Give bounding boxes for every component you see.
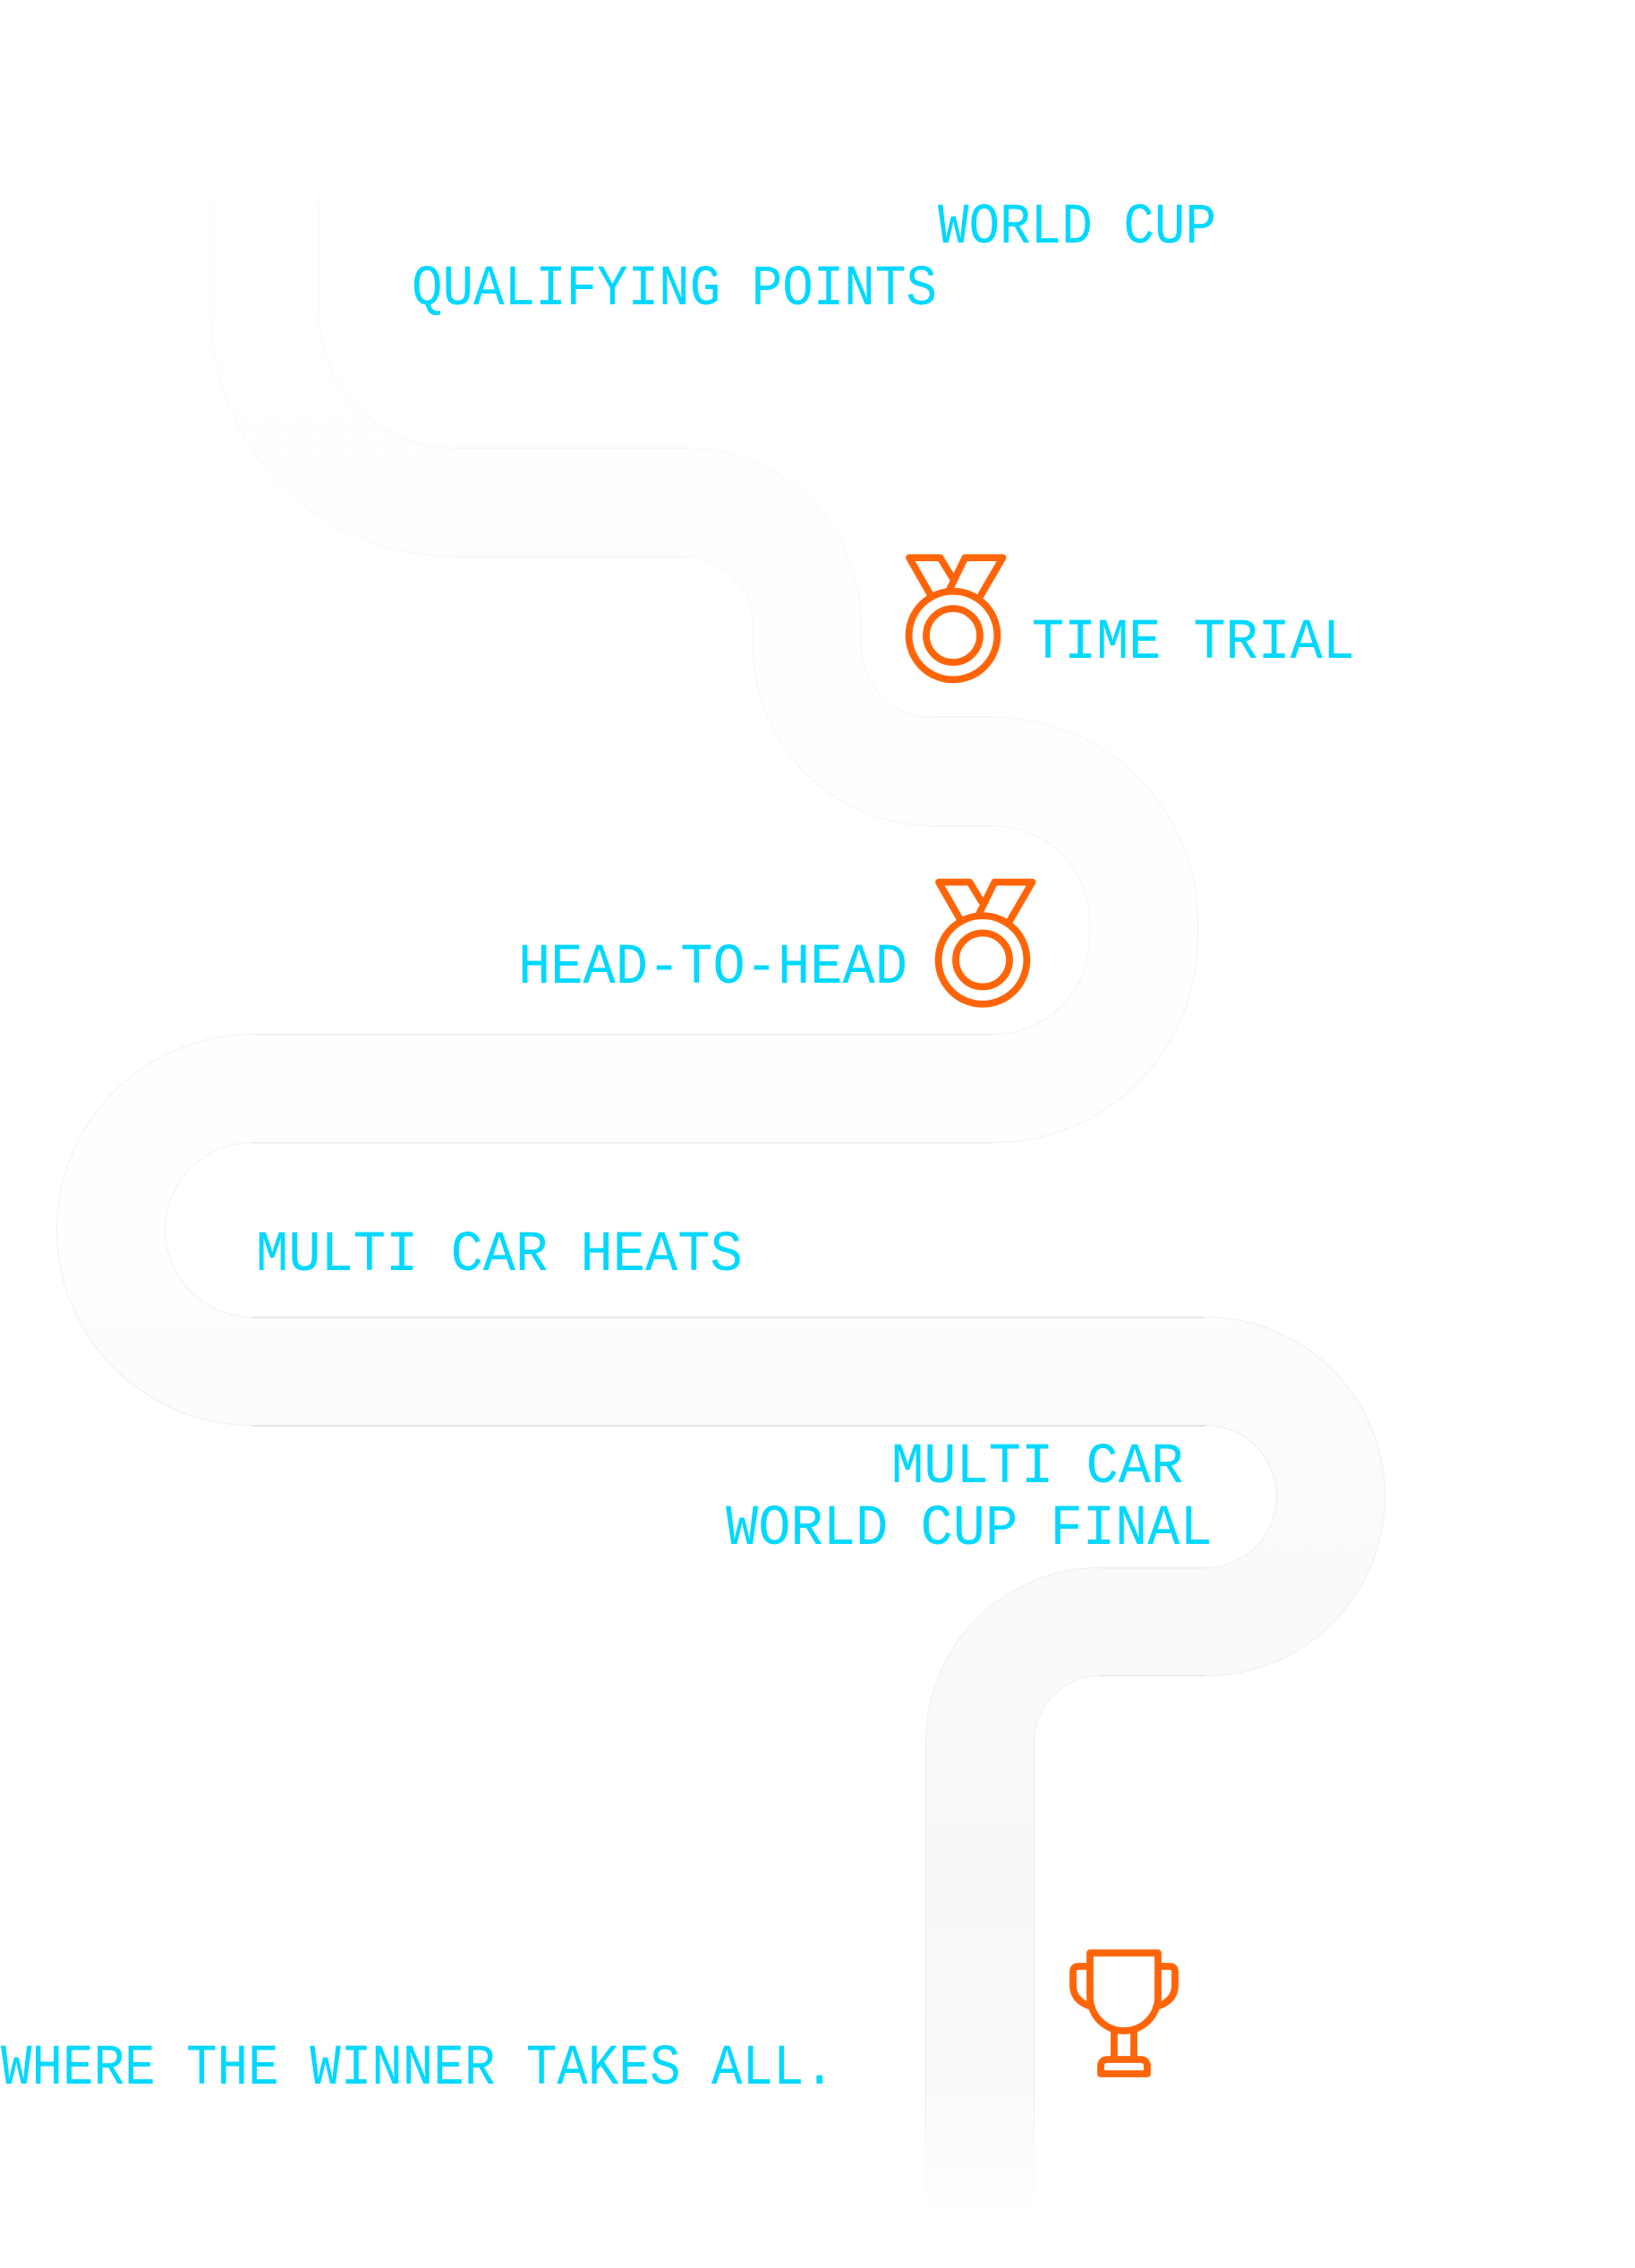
closing line: where the winner takes all: WHERE THE WINNER TAKES ALL.	[1, 2036, 835, 2102]
label: time trial: TIME TRIAL	[1032, 610, 1355, 676]
heading: world cup qualifying points	[412, 195, 1216, 322]
label: head-to-head: HEAD-TO-HEAD	[518, 935, 907, 1001]
heading: world cup qualifying points: QUALIFYING POINTS	[412, 257, 937, 322]
winding race track	[111, 27, 1331, 2220]
label: multi car world cup final	[726, 1435, 1213, 1562]
icon: medal time trial	[909, 558, 1002, 679]
icon: medal head-to-head	[939, 882, 1033, 1004]
icon: trophy	[1073, 1953, 1175, 2074]
label: multi car world cup final: WORLD CUP FINAL	[726, 1496, 1213, 1562]
label: multi car heats: MULTI CAR HEATS	[256, 1223, 743, 1288]
heading: world cup qualifying points: WORLD CUP	[938, 195, 1216, 260]
label: multi car world cup final: MULTI CAR	[891, 1435, 1183, 1500]
